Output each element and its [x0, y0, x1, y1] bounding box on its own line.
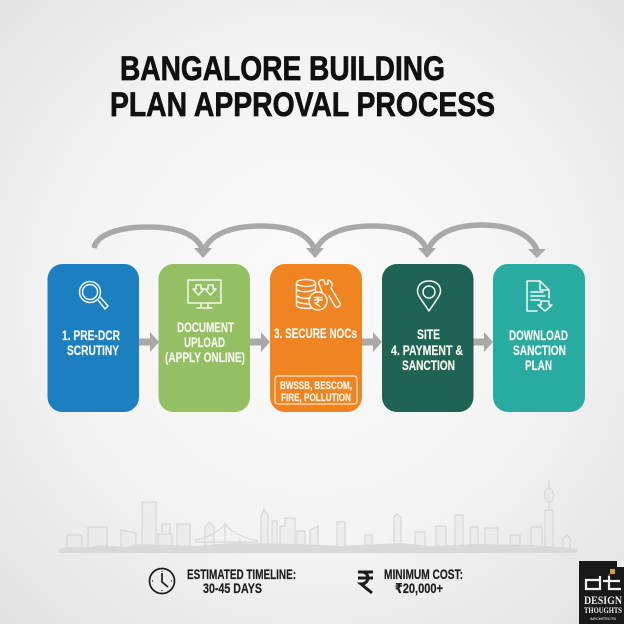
icon: magnifying glass [80, 282, 108, 309]
curved arrows between steps [94, 225, 546, 258]
icon: monitor with download arrows [188, 280, 221, 308]
NOC agencies callout [275, 376, 357, 404]
straight arrows between steps [139, 332, 493, 352]
logo: Design Thoughts Architects [579, 561, 624, 624]
cost text [384, 567, 463, 596]
timeline text [187, 567, 296, 596]
cost text: ₹20,000+ [395, 581, 443, 596]
step 5 label: DOWNLOAD [509, 328, 568, 343]
step 4 label: SANCTION [402, 358, 455, 373]
NOC agencies callout: FIRE, POLLUTION [281, 392, 351, 404]
minimum cost [358, 567, 463, 596]
icon: coins, rupee and wrench [296, 280, 340, 310]
step 4 label: SITE [417, 327, 440, 342]
step 5 label: PLAN [525, 358, 552, 373]
step 4 label [391, 327, 463, 373]
NOC agencies callout: BWSSB, BESCOM, [280, 380, 352, 392]
step 1 label: 1. PRE-DCR [62, 328, 120, 343]
step 5 label [509, 328, 568, 373]
step 2 label: DOCUMENT [177, 320, 235, 335]
title: PLAN APPROVAL PROCESS [110, 86, 495, 124]
step 1 label: SCRUTINY [67, 343, 119, 358]
icon: document with download arrow [527, 281, 552, 311]
step 5 label: SANCTION [513, 343, 566, 358]
title: BANGALORE BUILDING [120, 50, 445, 88]
icon: clock [150, 568, 174, 594]
timeline text: 30-45 DAYS [203, 581, 262, 596]
icon: rupee symbol [358, 572, 373, 593]
step 2 label: (APPLY ONLINE) [165, 350, 245, 365]
title [110, 50, 495, 124]
icon: location pin [418, 281, 440, 311]
timeline text: ESTIMATED TIMELINE: [187, 567, 296, 582]
step 2 label [165, 320, 245, 365]
panel: step 3 secure NOCs [270, 264, 362, 412]
step 4 label: 4. PAYMENT & [391, 343, 463, 358]
estimated timeline [150, 567, 296, 596]
step 1 label [62, 328, 120, 358]
step 2 label: UPLOAD [184, 335, 225, 350]
step 3 label: 3. SECURE NOCs [274, 326, 357, 341]
city skyline [59, 480, 577, 553]
logo: Design Thoughts Architects: ARCHITECTS [590, 616, 616, 621]
panel: step 5 download sanction plan [493, 264, 585, 412]
panel: step 4 site payment and sanction [382, 264, 474, 412]
panel: step 2 document upload [158, 264, 250, 412]
panel: step 1 pre-DCR scrutiny [48, 264, 139, 412]
cost text: MINIMUM COST: [384, 567, 463, 582]
